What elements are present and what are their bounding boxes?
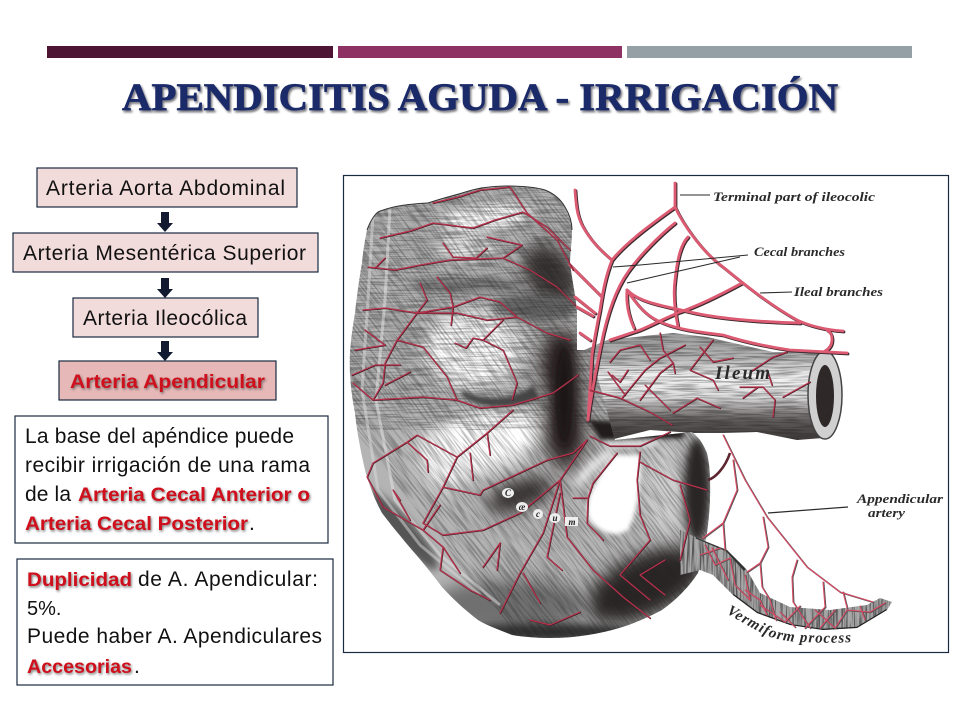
arteries	[352, 183, 886, 628]
text box: duplicity: .	[134, 655, 140, 678]
label: Ileal branches: Ileal branches	[793, 284, 883, 299]
darks on top	[462, 385, 540, 407]
box: Arteria Ileocólica	[73, 298, 258, 337]
label: Vermiform process: Vermiform process	[729, 605, 850, 646]
text box: duplicity: Duplicidad	[27, 569, 132, 591]
label: Appendicular artery: Appendicular	[856, 491, 944, 506]
box: Arteria Aorta Abdominal	[37, 168, 297, 207]
label: Caecum: m	[568, 517, 576, 527]
cecum body	[350, 186, 710, 638]
label: Caecum: u	[552, 513, 558, 523]
text box: base of appendix: Arteria Cecal Posterior	[25, 513, 248, 535]
label: Cecal branches: Cecal branches	[754, 244, 845, 259]
arrow 1	[157, 212, 173, 232]
text box: base of appendix	[15, 416, 328, 543]
header bars	[47, 46, 912, 58]
fold	[578, 452, 612, 484]
ileum tube	[575, 330, 842, 442]
label: Caecum	[502, 488, 578, 527]
text box: duplicity: 5%.	[27, 598, 61, 620]
panel: anatomical illustration	[342, 174, 950, 654]
text box: base of appendix: .	[249, 512, 255, 535]
box: Arteria Apendicular: Arteria Apendicular	[70, 371, 265, 393]
label: Caecum: æ	[519, 502, 526, 512]
arrow 2	[157, 278, 173, 298]
title: APENDICITIS AGUDA - IRRIGACIÓN	[122, 75, 838, 119]
flow chart: arterial hierarchy	[13, 168, 318, 400]
label: Caecum: C	[505, 488, 512, 498]
text box: duplicity: de A. Apendicular:	[138, 568, 318, 591]
text box: duplicity	[17, 559, 333, 685]
arrow 3	[157, 341, 173, 361]
cecum outline	[367, 186, 572, 230]
box: Arteria Ileocólica: Arteria Ileocólica	[83, 307, 247, 330]
white gap between lobes	[587, 455, 640, 534]
box: Arteria Apendicular	[59, 361, 276, 400]
box: Arteria Mesentérica Superior	[13, 233, 318, 272]
right lobe	[684, 438, 710, 542]
box: Arteria Aorta Abdominal: Arteria Aorta Abdominal	[46, 177, 285, 200]
label: Terminal part of ileocolic: Terminal part of ileocolic	[713, 189, 875, 204]
text box: base of appendix: de la	[25, 483, 71, 506]
label: Appendicular artery: artery	[868, 505, 905, 520]
text box: duplicity: Puede haber A. Apendiculares	[27, 625, 322, 648]
leader lines	[613, 195, 848, 513]
label: Caecum: c	[536, 509, 540, 519]
hatching	[350, 187, 610, 430]
ileum cut end	[808, 351, 842, 439]
text box: base of appendix: La base del apéndice puede	[25, 425, 294, 448]
text box: base of appendix: recibir irrigación de una rama	[25, 454, 310, 477]
shadows	[511, 234, 576, 305]
label: Appendicular artery	[856, 491, 944, 520]
highlights	[436, 199, 534, 237]
label: Ileum: Ileum	[714, 363, 770, 384]
text box: duplicity: Accesorias	[27, 656, 132, 678]
box: Arteria Mesentérica Superior: Arteria Mesentérica Superior	[23, 242, 306, 265]
text box: base of appendix: Arteria Cecal Anterior o	[78, 484, 310, 506]
vermiform appendix	[680, 530, 895, 635]
